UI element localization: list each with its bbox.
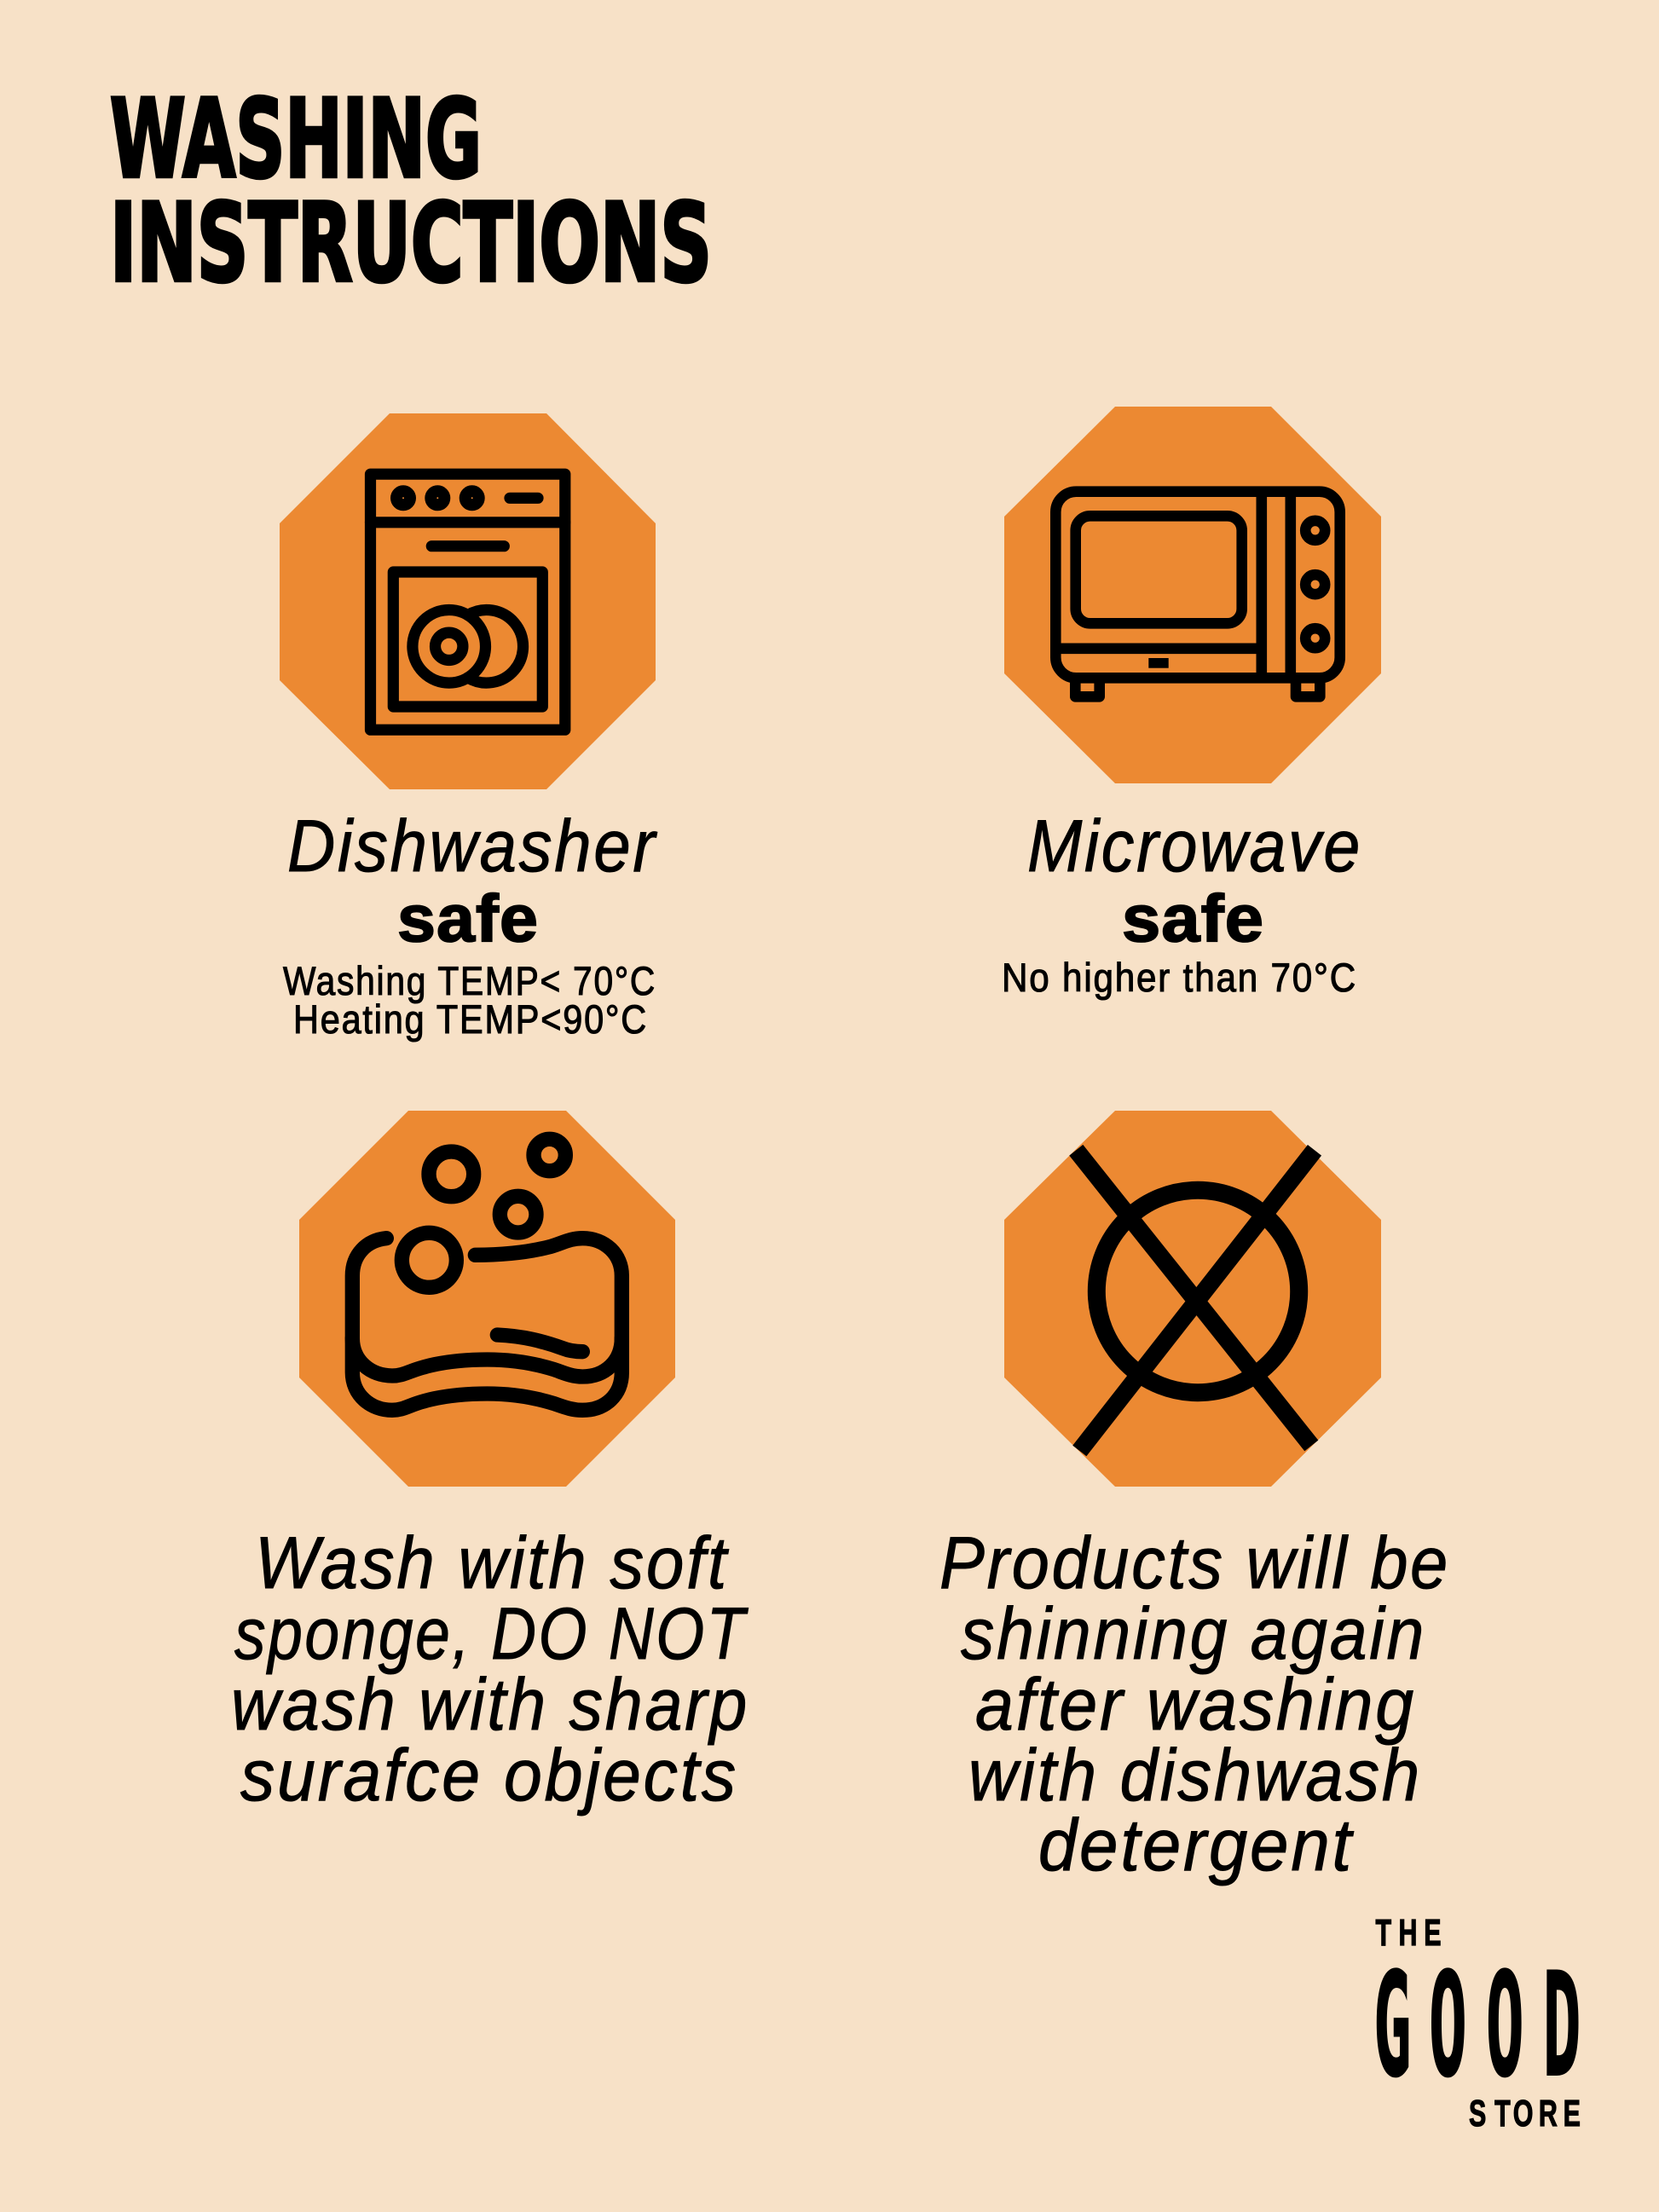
icon: sponge and bubbles [352, 1139, 621, 1410]
text: heating temperature: Heating TEMP<90°C [293, 996, 648, 1042]
text: detergent instruction [939, 1522, 1450, 1886]
text: detergent instruction: Products will be [939, 1522, 1450, 1604]
label: Dishwasher: Dishwasher [287, 806, 657, 887]
panel: dishwasher safe [280, 413, 657, 1042]
text: sponge instruction: Wash with soft [255, 1522, 729, 1604]
text: detergent instruction: shinning again [961, 1593, 1426, 1675]
icon: dishwasher [370, 474, 565, 730]
panel: microwave safe [1002, 407, 1381, 1000]
logo: The Good Store: THE [1376, 1912, 1442, 1953]
text: sponge instruction: surafce objects [240, 1735, 738, 1816]
icon badge: dishwasher octagon [280, 413, 656, 789]
text: detergent instruction: detergent [1038, 1805, 1354, 1886]
text: sponge instruction [231, 1522, 749, 1816]
logo: The Good Store: STORE [1469, 2093, 1581, 2134]
text: washing temperature: Washing TEMP< 70°C [283, 958, 656, 1003]
label: safe: safe [397, 881, 539, 956]
label: Microwave: Microwave [1027, 806, 1362, 887]
icon: microwave [1055, 492, 1340, 696]
text: sponge instruction: wash with sharp [231, 1664, 749, 1746]
label: safe: safe [1122, 881, 1264, 956]
icon: crossed-out circle [1076, 1150, 1315, 1451]
text: sponge instruction: sponge, DO NOT [234, 1593, 749, 1675]
logo: The Good Store: GOOD [1373, 1943, 1581, 2109]
title [110, 76, 712, 306]
icon badge: sponge octagon [299, 1111, 675, 1487]
text: temperature limit: No higher than 70°C [1002, 955, 1357, 1000]
panel: dishwash detergent [939, 1111, 1450, 1886]
title: WASHING [110, 76, 482, 202]
text: detergent instruction: with dishwash [968, 1735, 1422, 1816]
panel: soft sponge [231, 1111, 749, 1816]
icon badge: microwave octagon [1004, 407, 1381, 783]
text: detergent instruction: after washing [975, 1664, 1416, 1746]
icon badge: crossed circle octagon [1004, 1111, 1381, 1487]
title: INSTRUCTIONS [110, 180, 712, 306]
